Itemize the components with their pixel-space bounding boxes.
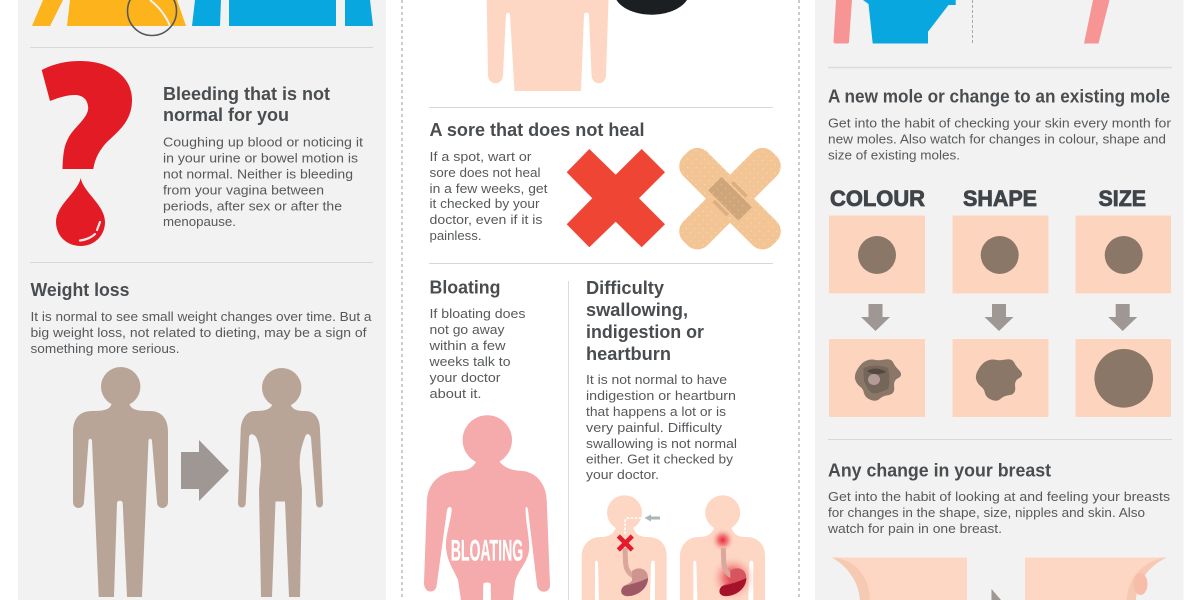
heading: sore: A sore that does not heal bbox=[430, 120, 644, 140]
arrow: weight loss change bbox=[181, 440, 229, 501]
column: size change: SIZE bbox=[1098, 186, 1146, 211]
column: colour change: COLOUR bbox=[830, 186, 925, 211]
icon: peach body with dark shape bbox=[487, 0, 687, 91]
icon: bloated body bbox=[424, 415, 550, 600]
heading: mole: A new mole or change to an existing mole bbox=[828, 87, 1170, 107]
icon: red question mark with blood drop bbox=[42, 61, 132, 246]
column: shape change bbox=[952, 186, 1048, 417]
heading: difficulty swallowing: Difficulty bbox=[586, 278, 664, 298]
heading: difficulty swallowing: indigestion or bbox=[586, 322, 704, 342]
text: bloating description: about it. bbox=[430, 386, 482, 401]
text: sore description: doctor, even if it is bbox=[430, 212, 543, 227]
text: bloating description: weeks talk to bbox=[428, 354, 510, 369]
text: bloating description bbox=[428, 306, 526, 401]
text: breast description: watch for pain in one breast. bbox=[827, 521, 1002, 536]
text: weight loss description: big weight loss, not related to dieting, may be a sign of bbox=[30, 325, 367, 340]
icon: breast before bbox=[832, 558, 967, 600]
text: breast description: Get into the habit of looking at and feeling your breasts bbox=[828, 489, 1171, 504]
text: weight loss description: It is normal to see small weight changes over time. But a bbox=[30, 309, 372, 324]
text: sore description: sore does not heal bbox=[430, 165, 541, 180]
heading: difficulty swallowing bbox=[586, 278, 704, 364]
text: swallowing description: swallowing is not normal bbox=[586, 436, 737, 451]
heading: bleeding: normal for you bbox=[163, 105, 289, 125]
icon: larger body bbox=[73, 367, 168, 597]
icon: swallowing blocked figure bbox=[582, 495, 667, 600]
icon: breast after with lump bbox=[1025, 558, 1167, 600]
text: swallowing description: very painful. Difficulty bbox=[586, 420, 723, 435]
heading: difficulty swallowing: swallowing, bbox=[586, 300, 688, 320]
text: bleeding description: Coughing up blood or noticing it bbox=[163, 135, 363, 150]
text: swallowing description: either. Get it checked by bbox=[586, 452, 734, 466]
text: mole description: Get into the habit of checking your skin every month for bbox=[828, 116, 1172, 131]
text: sore description: If a spot, wart or bbox=[430, 149, 532, 164]
text: sore description: painless. bbox=[430, 228, 482, 243]
heading: bleeding: Bleeding that is not bbox=[163, 84, 330, 104]
text: mole description bbox=[828, 116, 1172, 163]
icon: red cross bbox=[567, 149, 665, 247]
text: mole description: size of existing moles. bbox=[828, 148, 960, 163]
panel: middle column bbox=[424, 0, 787, 600]
heading: weight loss: Weight loss bbox=[30, 280, 130, 300]
heading: bleeding bbox=[163, 84, 330, 125]
text: bloating description: your doctor bbox=[430, 370, 501, 385]
text: weight loss description bbox=[30, 309, 372, 356]
icon: heartburn figure bbox=[680, 495, 765, 600]
text: sore description bbox=[430, 149, 548, 243]
icon: crossed plasters bbox=[673, 142, 787, 255]
text: bleeding description: periods, after sex or after the bbox=[163, 198, 342, 214]
text: swallowing description: indigestion or heartburn bbox=[586, 388, 736, 403]
text: bloating description: not go away bbox=[430, 322, 505, 337]
column: size change bbox=[1076, 186, 1171, 417]
text: bleeding description: not normal. Neither is bleeding bbox=[163, 166, 353, 182]
text: bleeding description bbox=[163, 135, 363, 229]
text: swallowing description bbox=[586, 372, 737, 482]
text: bleeding description: from your vagina between bbox=[163, 182, 324, 198]
text: bleeding description: menopause. bbox=[163, 214, 236, 229]
panel: left column bbox=[18, 0, 386, 600]
text: sore description: it checked by your bbox=[430, 196, 540, 211]
text: swallowing description: your doctor. bbox=[586, 467, 659, 482]
icon: bloated body: BLOATING bbox=[451, 534, 523, 568]
text: swallowing description: that happens a lot or is bbox=[586, 404, 727, 419]
text: sore description: in a few weeks, get bbox=[430, 181, 548, 196]
text: bleeding description: in your urine or bowel motion is bbox=[163, 150, 359, 166]
panel: right column bbox=[815, 0, 1184, 600]
text: bloating description: within a few bbox=[428, 338, 506, 353]
text: mole description: new moles. Also watch for changes in colour, shape and bbox=[828, 132, 1166, 147]
heading: bloating: Bloating bbox=[430, 278, 500, 298]
text: bloating description: If bloating does bbox=[430, 306, 526, 321]
column: shape change: SHAPE bbox=[963, 186, 1037, 211]
heading: breast: Any change in your breast bbox=[828, 461, 1051, 481]
text: breast description: for changes in the shape, size, nipples and skin. Also bbox=[828, 505, 1145, 520]
text: breast description bbox=[827, 489, 1171, 536]
column: colour change bbox=[829, 186, 925, 417]
text: swallowing description: It is not normal to have bbox=[586, 372, 727, 387]
arrow: breast change bbox=[992, 589, 1001, 600]
text: weight loss description: something more serious. bbox=[30, 341, 180, 356]
figure: clothed bodies cropped at top bbox=[32, 0, 373, 36]
icon: thinner body bbox=[238, 368, 323, 597]
icon: figure in blue top, cropped bbox=[834, 0, 1110, 45]
heading: difficulty swallowing: heartburn bbox=[586, 344, 671, 364]
